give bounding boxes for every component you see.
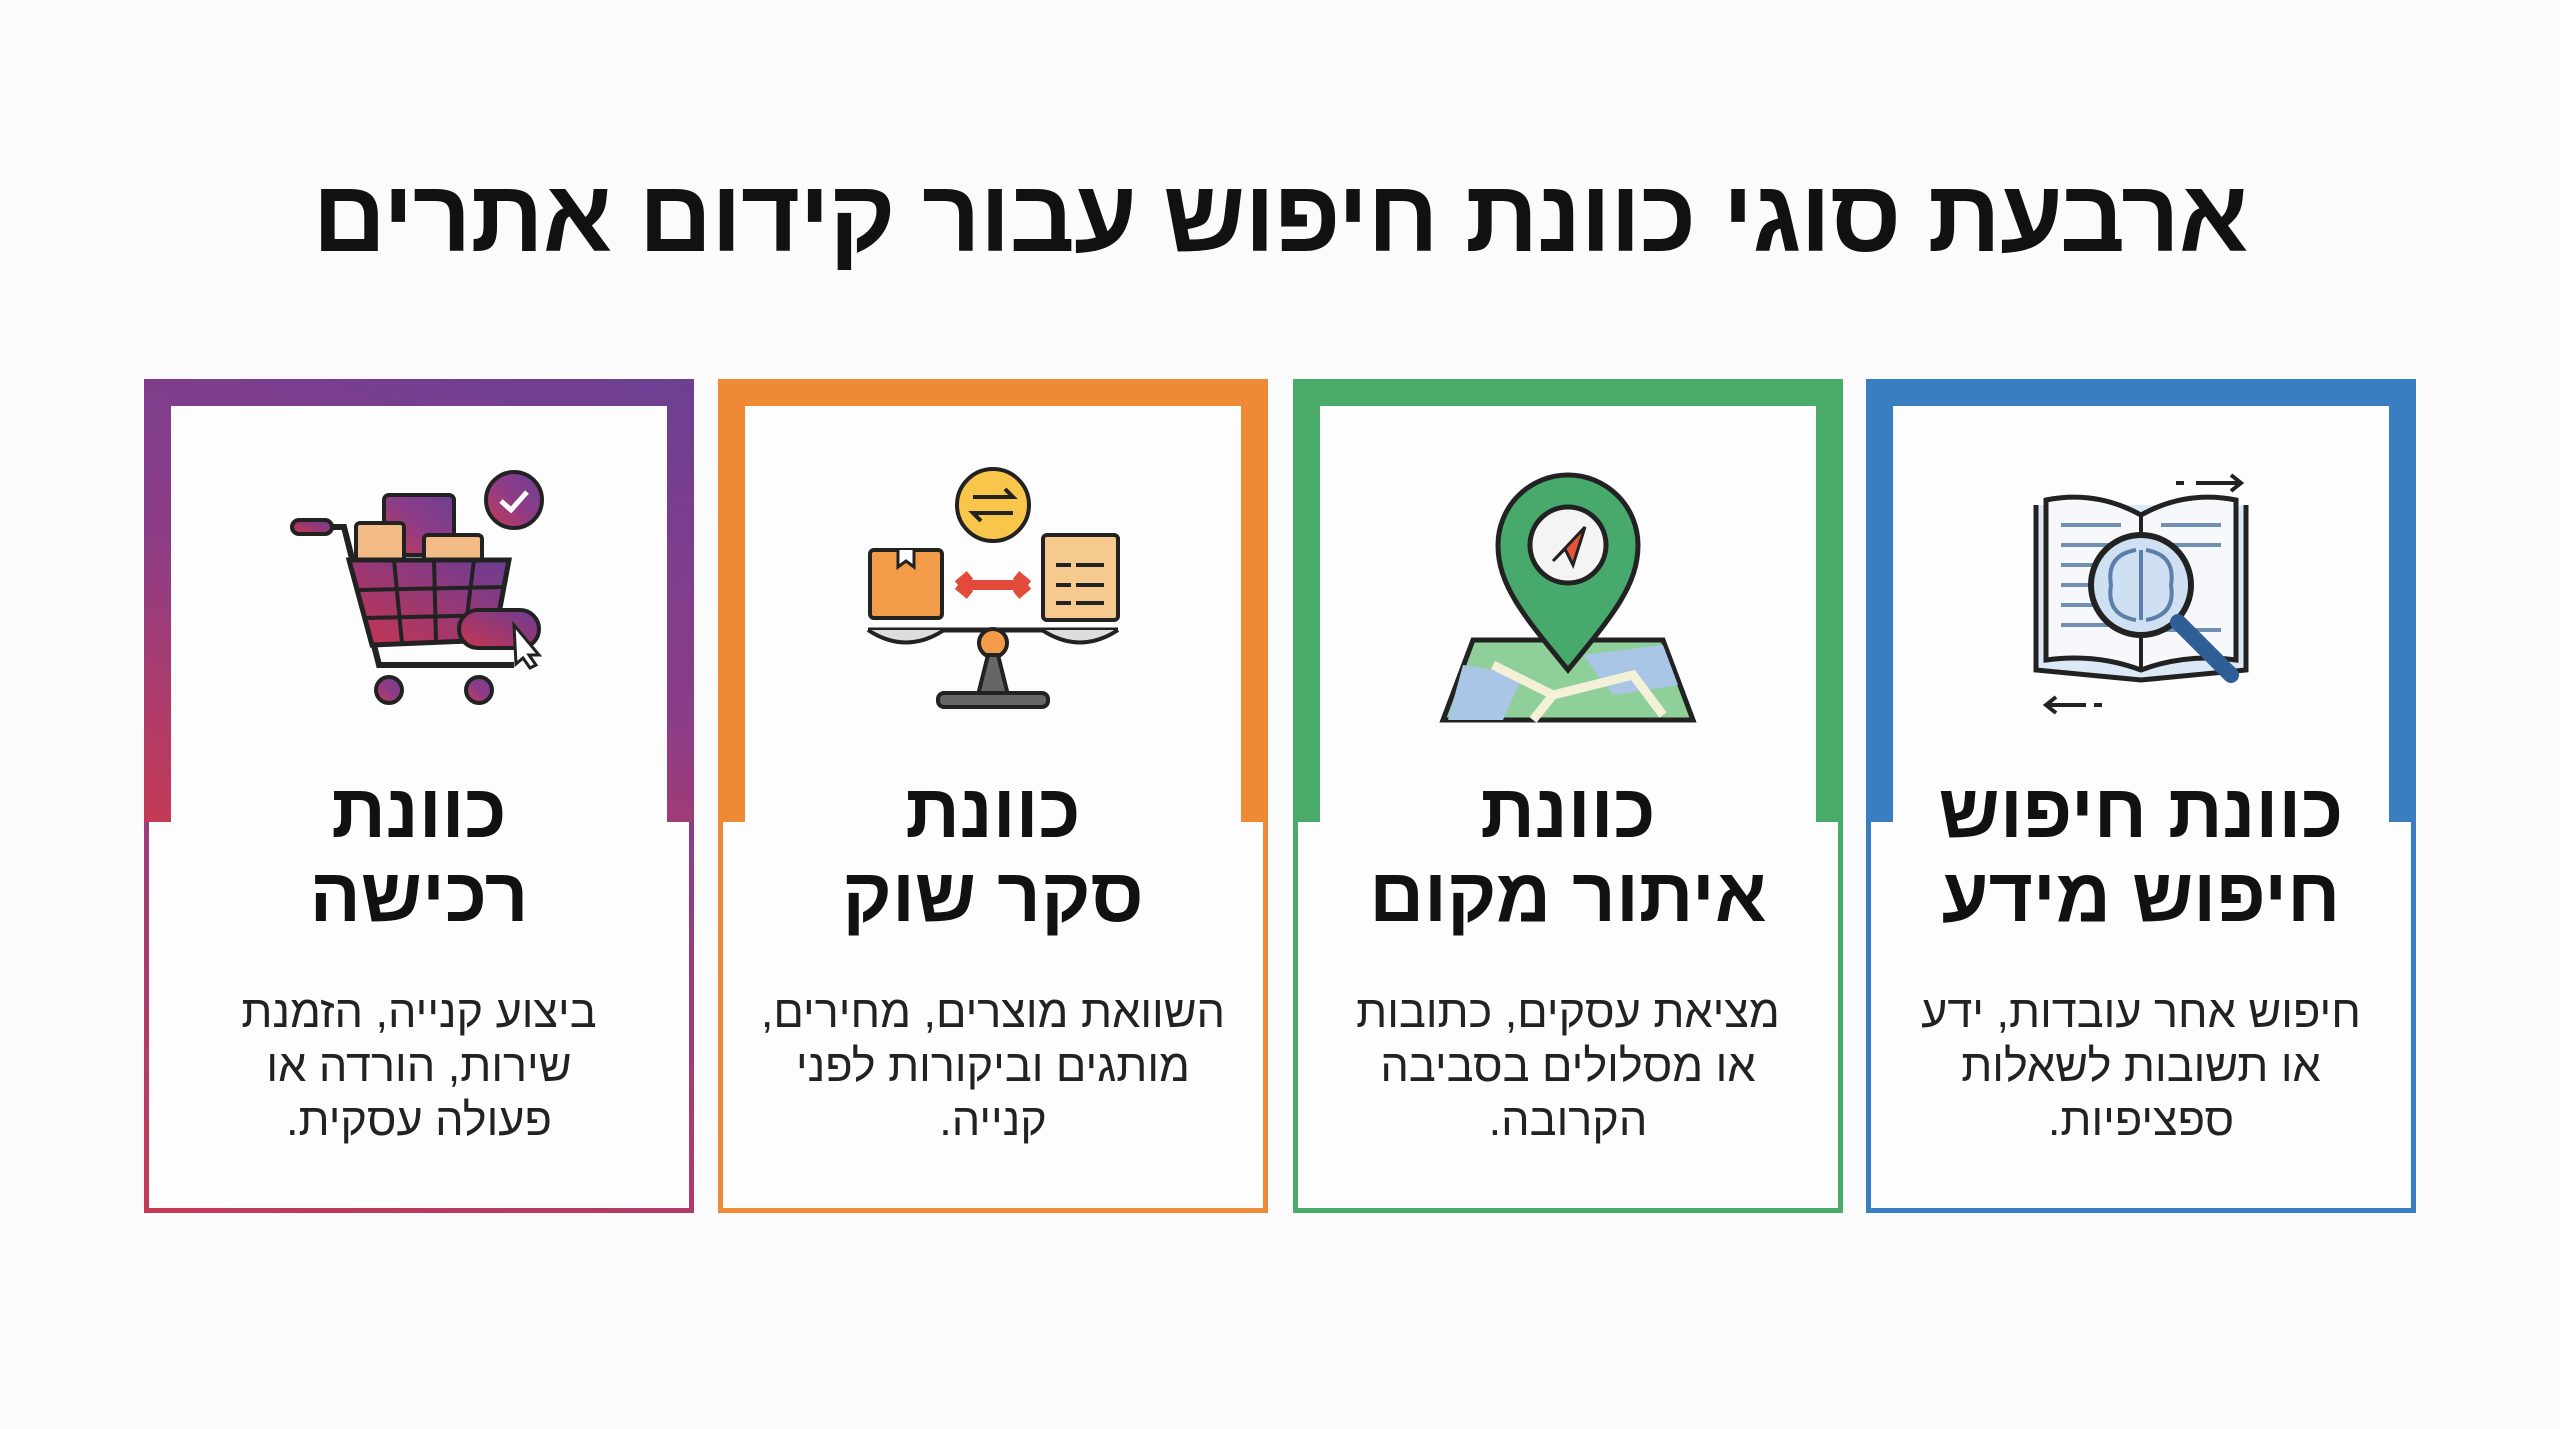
panel: information intent — [1866, 379, 2416, 1213]
icon: scale comparison — [866, 467, 1120, 709]
heading: location: כוונת — [1480, 769, 1656, 854]
heading: purchase: רכישה — [309, 853, 529, 938]
heading: purchase: כוונת — [331, 769, 507, 854]
text: purchase description: פעולה עסקית. — [286, 1094, 552, 1145]
text: information description — [1921, 986, 2361, 1145]
panel: purchase intent — [144, 379, 694, 1213]
text: market research description: השוואת מוצרים, מחירים, — [761, 986, 1225, 1037]
panel: location intent — [1293, 379, 1843, 1213]
heading: location: איתור מקום — [1369, 853, 1767, 938]
heading: information — [1939, 769, 2343, 938]
text: market research description: קנייה. — [939, 1094, 1047, 1145]
heading: purchase — [309, 769, 529, 938]
text: market research description — [761, 986, 1225, 1145]
heading: location — [1369, 769, 1767, 938]
text: purchase description — [241, 986, 597, 1145]
icon: map pin — [1439, 472, 1697, 722]
heading: market research: סקר שוק — [842, 853, 1144, 938]
icon: shopping cart — [290, 470, 544, 705]
text: information description: ספציפיות. — [2048, 1094, 2234, 1145]
heading: information: כוונת חיפוש — [1939, 769, 2343, 854]
text: location description — [1356, 986, 1780, 1145]
text: market research description: מותגים וביקורות לפני — [796, 1040, 1190, 1091]
icon: book with magnifier — [2034, 474, 2248, 714]
text: purchase description: שירות, הורדה או — [266, 1040, 572, 1091]
title: ארבעת סוגי כוונת חיפוש עבור קידום אתרים — [313, 159, 2247, 273]
text: information description: או תשובות לשאלות — [1961, 1040, 2321, 1091]
heading: market research — [842, 769, 1144, 938]
panel: market research intent — [718, 379, 1268, 1213]
text: location description: מציאת עסקים, כתובות — [1356, 986, 1780, 1037]
text: location description: הקרובה. — [1489, 1094, 1647, 1145]
heading: market research: כוונת — [905, 769, 1081, 854]
text: location description: או מסלולים בסביבה — [1380, 1040, 1756, 1091]
text: information description: חיפוש אחר עובדות, ידע — [1921, 986, 2361, 1037]
heading: information: חיפוש מידע — [1942, 853, 2340, 938]
text: purchase description: ביצוע קנייה, הזמנת — [241, 986, 597, 1037]
